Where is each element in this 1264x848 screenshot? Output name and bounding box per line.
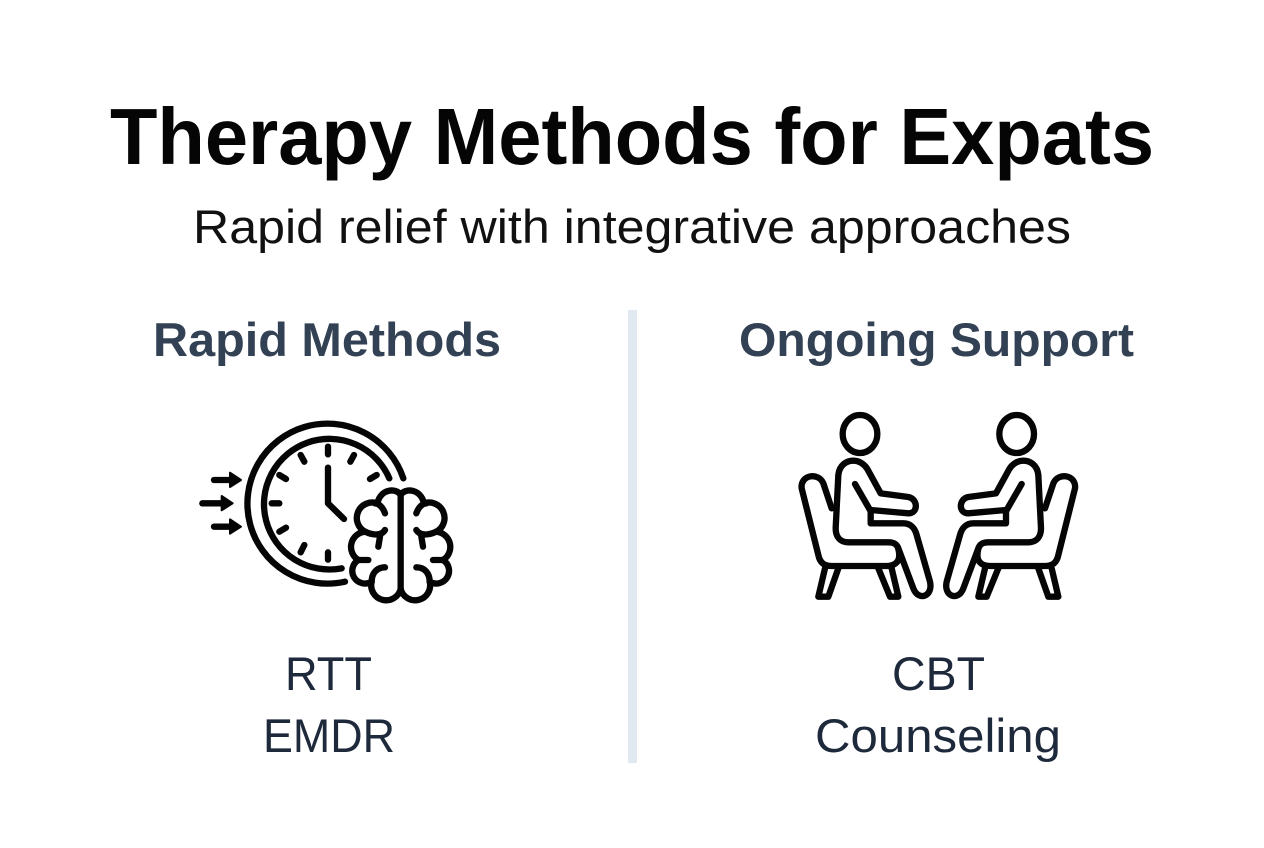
list: ongoing support: Counseling [815,709,1061,762]
panel: ongoing support [739,313,1134,762]
panel: rapid methods [153,313,501,762]
list: ongoing support [815,647,1061,762]
icon part: seated person right [946,415,1075,597]
icon part: clock [247,424,403,584]
icon: clock with brain and arrows [202,424,450,600]
list: rapid methods: RTT [285,647,372,700]
title: Therapy Methods for Expats [110,92,1154,181]
heading: rapid methods: Rapid Methods [153,313,501,366]
list: rapid methods [263,647,395,762]
icon part: brain [351,490,450,600]
divider [628,310,637,763]
icon part: seated person left [802,415,930,597]
subtitle: Rapid relief with integrative approaches [193,200,1071,253]
list: ongoing support: CBT [892,647,985,700]
icon part: speed arrows [202,473,241,534]
list: rapid methods: EMDR [263,709,395,762]
heading: ongoing support: Ongoing Support [739,313,1134,366]
icon: two people seated in conversation [802,415,1075,597]
